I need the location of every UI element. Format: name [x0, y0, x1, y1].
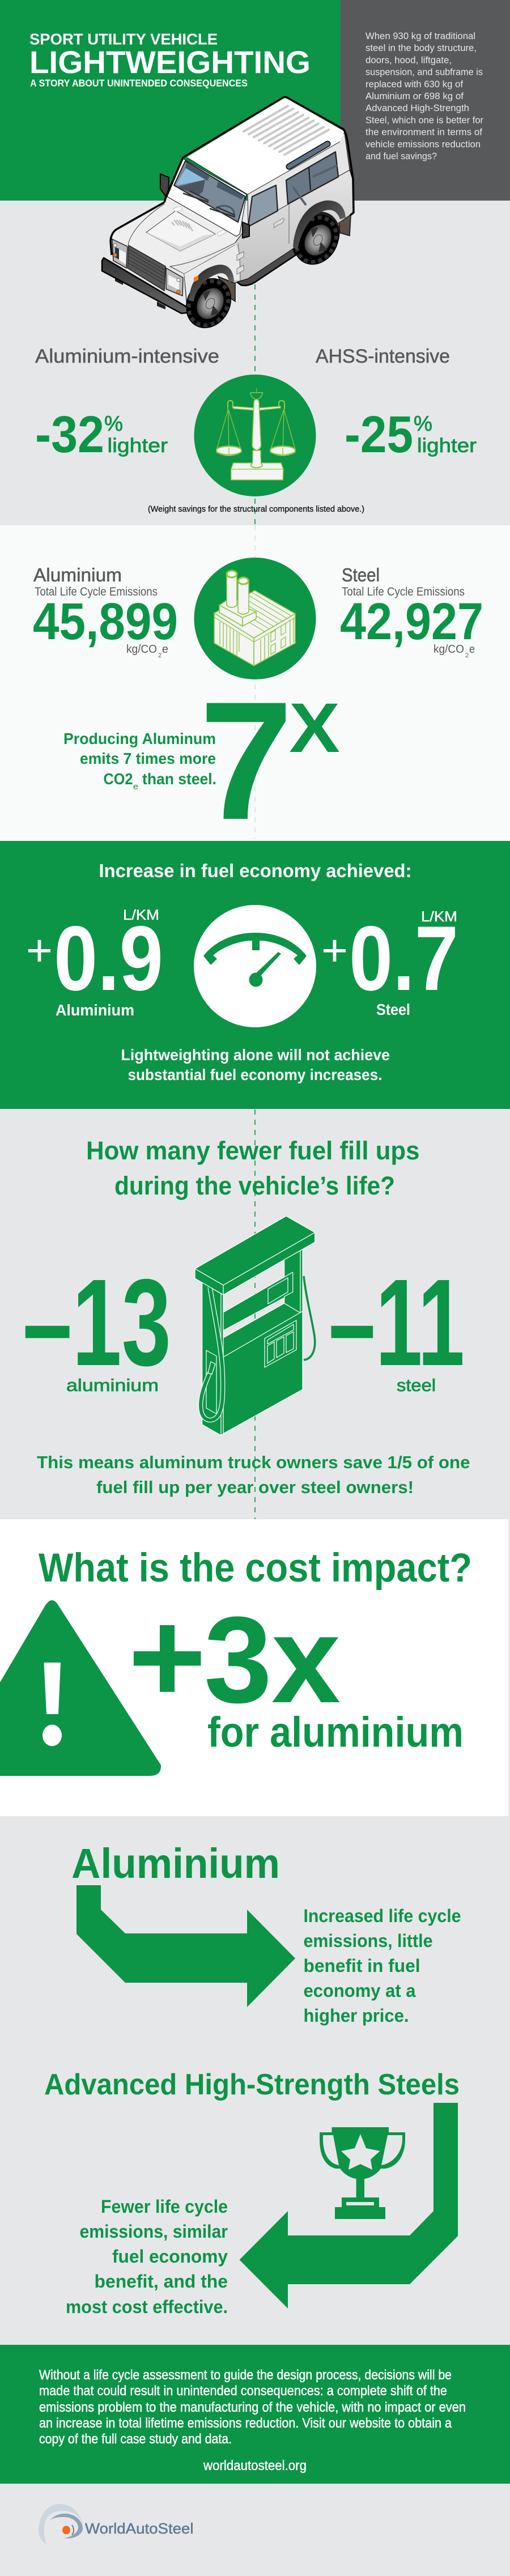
- grille: [128, 245, 165, 291]
- panel: conclusions: [0, 1816, 510, 2345]
- aluminium summary text: benefit in fuel: [304, 1956, 420, 1976]
- stat: 7x: X: [289, 689, 340, 767]
- intro question text: When 930 kg of traditional: [366, 31, 475, 41]
- logo: WorldAutoSteel: [39, 2504, 194, 2544]
- text: producing aluminium: e: [133, 782, 138, 792]
- heading: aluminium-intensive: Aluminium-intensive: [35, 346, 219, 367]
- icon: trophy: [320, 2127, 405, 2219]
- title: A STORY ABOUT UNINTENDED CONSEQUENCES: [30, 77, 248, 88]
- website: worldautosteel.org: [203, 2458, 307, 2473]
- stat: 7x: 7: [199, 666, 293, 855]
- stat: AHSS -25% lighter: %: [414, 412, 432, 436]
- aluminium summary text: Increased life cycle: [304, 1906, 461, 1926]
- logo: WorldAutoSteel: WorldAutoSteel: [85, 2520, 194, 2537]
- stat: aluminium -32% lighter: [35, 406, 168, 464]
- stat: steel +0.7: L/KM: [421, 909, 457, 925]
- stat: aluminium -13: aluminium: [66, 1375, 159, 1395]
- aluminium conclusion: [71, 1840, 461, 2026]
- windshield frame: [167, 159, 246, 236]
- stat: steel +0.7: Steel: [376, 1001, 410, 1018]
- body text: an increase in total lifetime emissions reduction. Visit our website to obtain a: [39, 2416, 452, 2431]
- outline: [110, 97, 354, 255]
- hood: [112, 197, 236, 266]
- panel: fuel fill ups: [0, 1109, 510, 1519]
- body text: made that could result in unintended consequences: a complete shift of the: [39, 2383, 447, 2399]
- intro question text: [366, 31, 483, 161]
- panel: weight savings: [0, 201, 510, 525]
- steel emissions: Steel: [342, 564, 380, 585]
- body text: emissions problem to the manufacturing of the vehicle, with no impact or even: [39, 2400, 466, 2415]
- stat: +3x: for aluminium: [207, 1708, 464, 1755]
- panel: footer: [0, 2484, 510, 2576]
- stat: aluminium -32% lighter: lighter: [108, 435, 168, 457]
- stat: aluminium +0.9: [26, 907, 163, 1019]
- steel emissions: 2: [465, 652, 469, 659]
- hinges: [237, 252, 244, 274]
- stat: aluminium +0.9: L/KM: [123, 907, 159, 923]
- aluminium emissions: [33, 564, 178, 659]
- panel: cost impact: [0, 1519, 508, 1816]
- title: [29, 31, 311, 88]
- footnote: (Weight savings for the structural components listed above.): [148, 504, 364, 514]
- body text: [39, 2367, 466, 2447]
- aluminium emissions: e: [162, 643, 168, 656]
- stat: aluminium +0.9: Aluminium: [56, 1001, 134, 1019]
- steel summary text: emissions, similar: [79, 2221, 228, 2242]
- stat: steel -11: steel: [397, 1375, 436, 1395]
- conclusion text: fuel fill up per year over steel owners!: [96, 1477, 414, 1497]
- rear side window: [286, 152, 338, 205]
- text: producing aluminium: Producing Aluminum: [63, 730, 216, 747]
- stat: AHSS -25% lighter: lighter: [417, 435, 477, 457]
- steel summary text: most cost effective.: [66, 2297, 228, 2317]
- aluminium emissions: Aluminium: [33, 564, 122, 585]
- mirrors: [160, 174, 249, 238]
- aluminium emissions: 45,899: [33, 593, 178, 651]
- intro question text: steel in the body structure,: [366, 42, 477, 53]
- stat: 7x: [199, 666, 340, 855]
- title: LIGHTWEIGHTING: [29, 44, 311, 80]
- conclusion text: Lightweighting alone will not achieve: [121, 1046, 390, 1064]
- icon: balance scale: [194, 375, 316, 496]
- aluminium emissions: Total Life Cycle Emissions: [35, 585, 158, 598]
- steel emissions: Total Life Cycle Emissions: [342, 585, 465, 598]
- door window: [248, 185, 278, 227]
- right headlight: [166, 268, 183, 296]
- left headlight: [112, 239, 128, 268]
- illustration: white SUV: [102, 97, 354, 337]
- intro question text: doors, hood, liftgate,: [366, 54, 452, 65]
- intro question text: suspension, and subframe is: [366, 67, 483, 78]
- intro question text: Advanced High-Strength: [366, 103, 469, 113]
- steel emissions: [340, 564, 483, 659]
- arrow: steel: [239, 2103, 458, 2309]
- stat: aluminium -32% lighter: %: [104, 412, 123, 436]
- aluminium summary text: economy at a: [304, 1980, 416, 2001]
- conclusion text: [37, 1452, 470, 1497]
- heading: How many fewer fuel fill ups: [86, 1136, 419, 1165]
- door handle: [274, 218, 284, 228]
- windshield glass: [174, 161, 245, 222]
- steel conclusion: [44, 2068, 460, 2317]
- side marker lamp: [194, 275, 198, 282]
- panel: life cycle emissions: [0, 525, 510, 855]
- stat: AHSS -25% lighter: [345, 406, 477, 464]
- stat: steel +0.7: [321, 907, 458, 1018]
- stat: +3x: x: [271, 1591, 341, 1728]
- heading: AHSS-intensive: AHSS-intensive: [316, 346, 450, 367]
- panel: closing statement: [0, 2345, 510, 2484]
- stat: +3x: +: [128, 1584, 206, 1731]
- aluminium summary text: higher price.: [304, 2005, 409, 2026]
- aluminium summary text: [304, 1906, 461, 2026]
- heading: What is the cost impact?: [39, 1546, 472, 1591]
- stat: +3x: 3: [204, 1591, 272, 1728]
- stat: aluminium +0.9: 0.9: [54, 907, 163, 1010]
- steel summary text: [66, 2196, 228, 2317]
- intro question text: Steel, which one is better for: [366, 114, 483, 125]
- stat: AHSS -25% lighter: -25: [345, 406, 413, 464]
- front wheel: [177, 265, 240, 337]
- stat: aluminium -32% lighter: -32: [35, 406, 104, 464]
- heading: Increase in fuel economy achieved:: [99, 860, 411, 881]
- text: producing aluminium: [63, 730, 216, 792]
- front mudflap: [218, 277, 235, 301]
- panel: header: [0, 0, 510, 201]
- icon: warning triangle: [0, 1600, 161, 1776]
- steel summary text: benefit, and the: [94, 2271, 228, 2292]
- conclusion text: This means aluminum truck owners save 1/5 of one: [37, 1452, 470, 1472]
- heading: during the vehicle’s life?: [114, 1171, 395, 1200]
- steel emissions: e: [469, 643, 475, 656]
- sill: [235, 248, 296, 286]
- steel summary text: Fewer life cycle: [101, 2196, 228, 2217]
- arrow: aluminium: [76, 1885, 295, 2007]
- title: SPORT UTILITY VEHICLE: [29, 31, 218, 48]
- stat: aluminium -13: –13: [23, 1254, 171, 1392]
- conclusion text: [121, 1046, 390, 1083]
- roof ribs: [244, 106, 329, 155]
- aluminium summary text: emissions, little: [304, 1931, 433, 1951]
- body side: [170, 170, 354, 309]
- aluminium emissions: kg/CO: [126, 643, 157, 656]
- steel emissions: kg/CO: [434, 643, 464, 656]
- conclusion text: substantial fuel economy increases.: [128, 1066, 382, 1083]
- stat: +3x: [128, 1584, 464, 1755]
- aluminium conclusion: Aluminium: [71, 1840, 280, 1887]
- stat: steel +0.7: 0.7: [349, 907, 458, 1010]
- steel emissions: 42,927: [340, 593, 483, 651]
- icon: gauge: [194, 905, 316, 1027]
- front fender: [168, 242, 240, 300]
- intro question text: and fuel savings?: [366, 151, 437, 161]
- steel summary text: fuel economy: [112, 2246, 228, 2267]
- rear wheel: [284, 201, 348, 273]
- cab side: [248, 133, 350, 227]
- icon: fuel pump: [195, 1216, 315, 1435]
- body text: copy of the full case study and data.: [39, 2432, 232, 2447]
- body text: Without a life cycle assessment to guide the design process, decisions will be: [39, 2367, 452, 2383]
- intro question text: vehicle emissions reduction: [366, 139, 481, 150]
- rear mudflap: [338, 215, 351, 236]
- bumper: [102, 258, 187, 313]
- panel: fuel economy: [0, 841, 510, 1109]
- alpine window: [289, 144, 328, 167]
- intro question text: replaced with 630 kg of: [366, 79, 463, 90]
- hood bulge: [146, 211, 215, 251]
- stat: steel +0.7: +: [321, 925, 348, 975]
- intro question text: Aluminium or 698 kg of: [366, 91, 464, 101]
- text: producing aluminium: CO2: [103, 770, 133, 788]
- steel conclusion: Advanced High-Strength Steels: [44, 2068, 460, 2101]
- stat: aluminium +0.9: +: [26, 925, 53, 975]
- roof: [187, 97, 345, 194]
- heading: [86, 1136, 419, 1200]
- intro question text: the environment in terms of: [366, 127, 482, 138]
- text: producing aluminium: than steel.: [142, 770, 216, 788]
- icon: factory: [194, 558, 316, 679]
- aluminium emissions: 2: [158, 652, 162, 659]
- text: producing aluminium: emits 7 times more: [80, 750, 216, 767]
